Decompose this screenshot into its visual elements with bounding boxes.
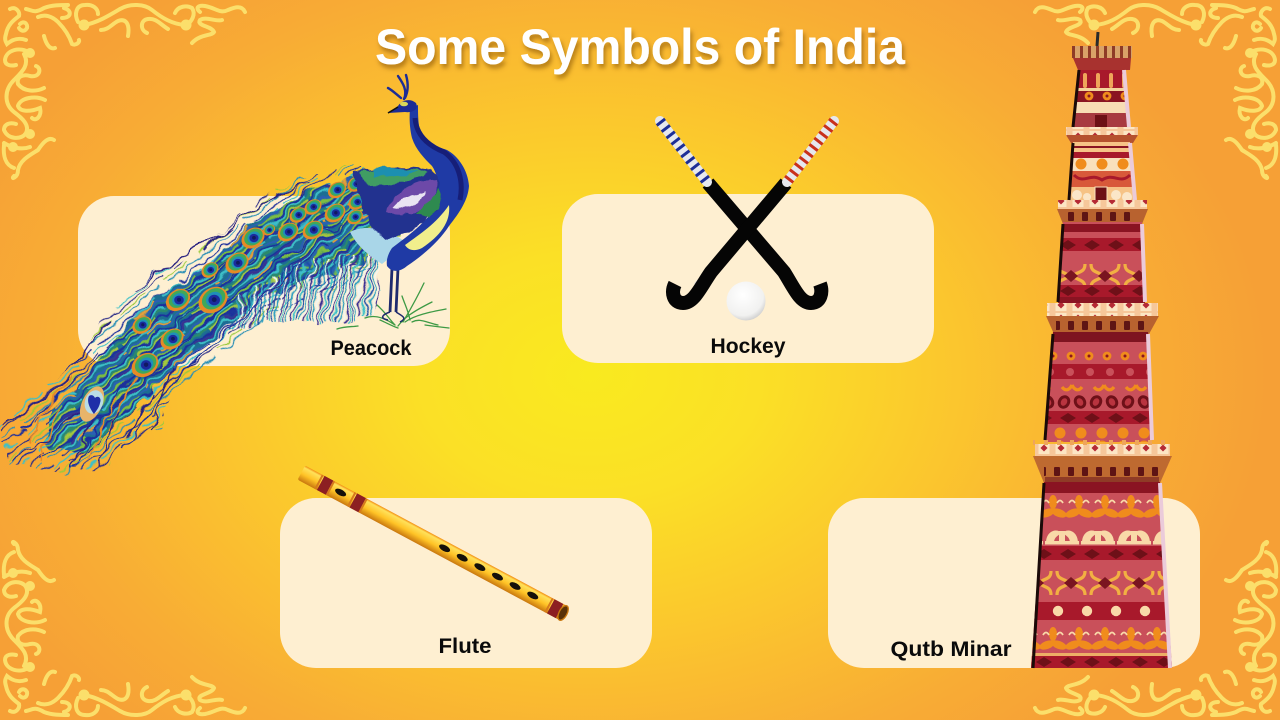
icon: crossed hockey sticks	[660, 121, 834, 320]
shaded left edges	[1033, 70, 1079, 668]
dense inner feathers	[45, 178, 405, 452]
neck shading	[415, 118, 461, 200]
legs	[383, 268, 404, 322]
balcony 3	[1046, 303, 1159, 334]
shaft 3	[1055, 222, 1150, 304]
neck and breast	[387, 105, 469, 271]
corner ornament: bottom right	[1035, 542, 1276, 715]
corner ornament: top right	[1035, 5, 1276, 178]
chest plumage	[352, 167, 441, 240]
top parapet	[1072, 46, 1132, 70]
panel: flute	[280, 498, 652, 668]
long feather strokes	[3, 183, 340, 468]
finial	[1097, 32, 1098, 46]
flute bands	[314, 475, 563, 618]
grass	[337, 283, 449, 329]
shaft 5 with ornament bands	[1028, 482, 1176, 668]
stick highlights	[728, 207, 797, 285]
yellow breast crescent	[405, 205, 449, 250]
title: Some Symbols of India	[375, 19, 906, 75]
stick: blue grip	[660, 121, 821, 303]
icon: Qutb Minar tower	[1028, 32, 1176, 668]
corner ornament: bottom left	[4, 542, 245, 715]
panel: hockey	[562, 194, 934, 363]
sparse outer feathers	[0, 165, 410, 472]
balcony 2	[1057, 200, 1148, 224]
icon: peacock	[0, 75, 469, 472]
flute holes	[334, 487, 539, 601]
lower fringe hairs	[228, 252, 380, 332]
label: Flute: Flute	[438, 635, 492, 658]
shaft 2	[1070, 142, 1133, 200]
label: Hockey: Hockey	[710, 335, 786, 358]
label: Qutb Minar: Qutb Minar	[890, 638, 1012, 661]
flute end	[556, 604, 570, 622]
eye spots	[75, 172, 380, 425]
hockey ball	[726, 282, 766, 320]
highlighted right edges	[1124, 70, 1170, 668]
shaft 1	[1074, 70, 1130, 127]
stick: red grip	[673, 121, 834, 303]
panel: peacock	[78, 196, 450, 366]
white flank plume	[350, 228, 408, 264]
panel: Qutb Minar	[828, 498, 1200, 668]
balcony 1	[1066, 127, 1138, 143]
icon: flute	[298, 466, 570, 622]
feathered train	[0, 165, 410, 472]
shaft 4	[1040, 332, 1155, 443]
head and crest	[388, 75, 417, 113]
corner ornament: top left	[4, 5, 245, 178]
label: Peacock: Peacock	[330, 337, 412, 360]
balcony 4	[1033, 440, 1172, 483]
